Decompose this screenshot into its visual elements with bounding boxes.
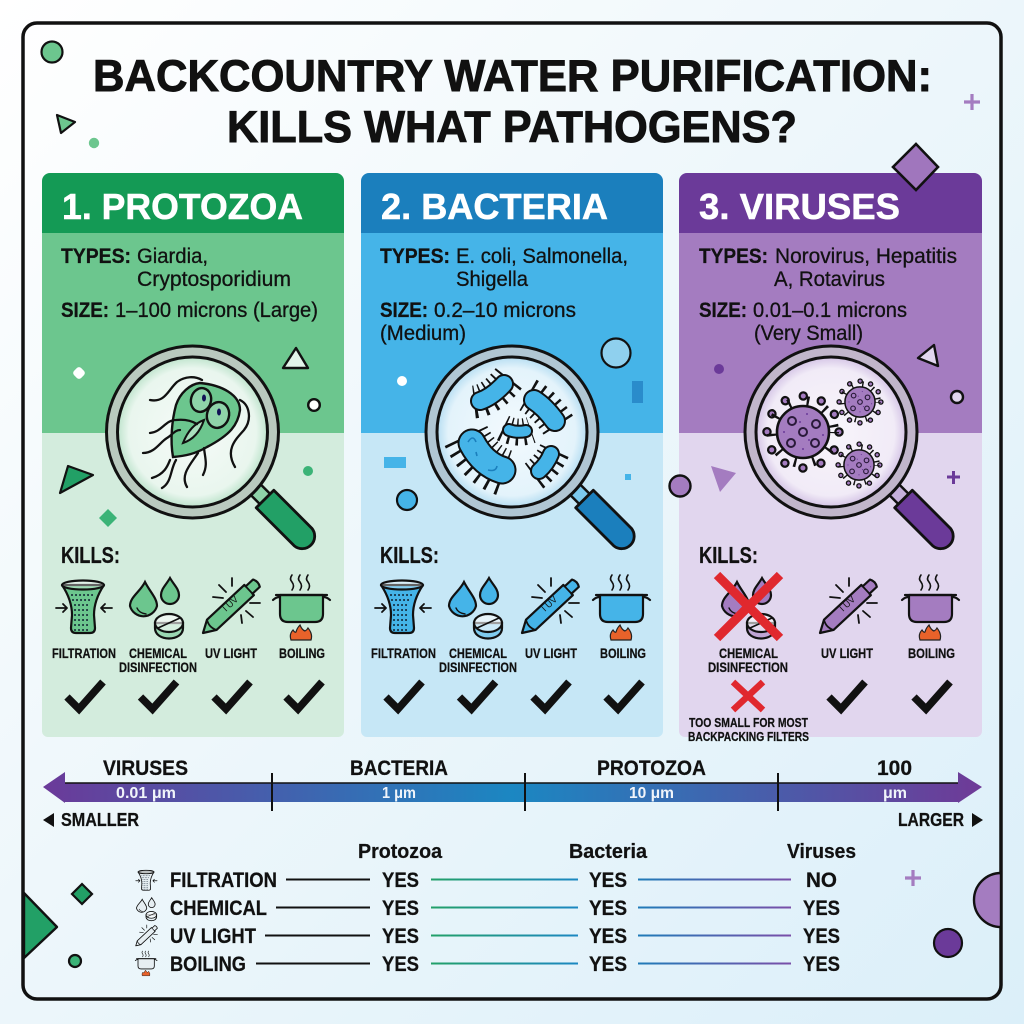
method: UV light: UV LIGHT <box>525 646 578 661</box>
row: chemical: CHEMICAL <box>170 897 267 920</box>
scale labels: 1 μm <box>382 785 416 802</box>
row: filtration: YES <box>382 869 419 892</box>
decorative shapes: top <box>42 42 980 148</box>
icon: magnifier with viruses <box>745 346 953 549</box>
table header <box>358 841 856 863</box>
scale arrow bar <box>43 772 982 803</box>
method: chemical disinfection <box>439 578 517 709</box>
method: boiling <box>902 575 959 709</box>
text block: types and size: A, Rotavirus <box>774 268 885 291</box>
row: chemical: YES <box>589 897 627 920</box>
heading: viruses: 3. VIRUSES <box>699 186 900 227</box>
method: filtration <box>52 580 116 709</box>
panel: bacteria <box>361 173 663 737</box>
note: filters: BACKPACKING FILTERS <box>688 730 809 744</box>
title <box>93 52 932 152</box>
panel background <box>679 173 982 737</box>
row: UV light: YES <box>803 925 840 948</box>
text block: types and size: 1–100 microns (Large) <box>115 299 318 322</box>
table header: Protozoa <box>358 841 443 863</box>
text block: types and size: SIZE: <box>380 299 428 322</box>
row: boiling: YES <box>589 953 627 976</box>
table header: Viruses <box>787 841 856 863</box>
table header: Bacteria <box>569 841 648 863</box>
decorative shapes: bacteria <box>384 338 643 510</box>
text block: types and size: E. coli, Salmonella, <box>456 245 628 268</box>
text block: types and size: Norovirus, Hepatitis <box>775 245 957 268</box>
row: UV light: YES <box>589 925 627 948</box>
text block: types and size: 0.2–10 microns <box>434 299 576 322</box>
heading: kills: KILLS: <box>380 542 439 568</box>
method: UV light: UV LIGHT <box>821 646 874 661</box>
decorative diamond <box>893 144 938 190</box>
heading: kills: KILLS: <box>61 542 120 568</box>
row: filtration: NO <box>806 869 837 892</box>
text block: types and size: (Very Small) <box>754 322 863 345</box>
heading: bacteria: 2. BACTERIA <box>381 186 608 227</box>
row: chemical: YES <box>382 897 419 920</box>
row: UV light <box>134 925 840 948</box>
text block: types and size: (Medium) <box>380 322 466 345</box>
panel: viruses <box>670 144 982 744</box>
row: filtration <box>136 869 837 892</box>
icon: magnifier with bacteria <box>426 346 634 549</box>
row: chemical <box>136 897 840 921</box>
row: UV light: YES <box>382 925 419 948</box>
method: chemical disinfection: CHEMICAL <box>129 646 187 661</box>
title: KILLS WHAT PATHOGENS? <box>227 103 797 152</box>
decorative shapes: protozoa <box>60 348 320 527</box>
method: UV light: UV LIGHT <box>205 646 258 661</box>
row: boiling: BOILING <box>170 953 246 976</box>
row: UV light: UV LIGHT <box>170 925 256 948</box>
row: filtration: YES <box>589 869 627 892</box>
method: chemical disinfection: DISINFECTION <box>439 660 517 675</box>
method: chemical disinfection <box>119 578 197 709</box>
icon: magnifier with giardia <box>106 346 315 549</box>
method: boiling: BOILING <box>279 646 325 661</box>
scale labels <box>103 757 912 802</box>
row: chemical: YES <box>803 897 840 920</box>
text block: types and size <box>699 245 957 345</box>
text block: types and size: TYPES: <box>380 245 450 268</box>
method: chemical disinfection (crossed out): CHEMICAL <box>719 646 778 661</box>
text block: types and size: Giardia, <box>137 245 208 268</box>
method: boiling: BOILING <box>908 646 955 661</box>
method: UV light: I UV <box>540 594 559 613</box>
method: boiling <box>273 575 330 709</box>
summary table <box>134 841 856 976</box>
text block: types and size <box>380 245 628 345</box>
method: chemical disinfection (crossed out) <box>708 575 788 710</box>
method: boiling: BOILING <box>600 646 646 661</box>
text block: types and size: Cryptosporidium <box>137 268 291 291</box>
method: boiling <box>593 575 650 709</box>
method: UV light: I UV <box>221 594 240 613</box>
method: chemical disinfection: CHEMICAL <box>449 646 507 661</box>
scale labels: VIRUSES <box>103 757 188 780</box>
scale labels: 0.01 μm <box>116 785 176 802</box>
method: filtration: FILTRATION <box>52 646 116 661</box>
method: UV light <box>517 577 581 709</box>
panel: protozoa <box>42 173 344 737</box>
method: chemical disinfection (crossed out): DISINFECTION <box>708 660 788 675</box>
text block: types and size: TYPES: <box>699 245 768 268</box>
heading: protozoa: 1. PROTOZOA <box>62 186 303 227</box>
panel background <box>42 173 344 737</box>
row: boiling: YES <box>382 953 419 976</box>
note: filters <box>688 716 809 744</box>
text block: types and size: 0.01–0.1 microns <box>753 299 907 322</box>
larger label: LARGER <box>898 810 964 830</box>
decorative shapes: viruses <box>670 345 963 496</box>
heading: kills: KILLS: <box>699 542 758 568</box>
panel background <box>361 173 663 737</box>
text block: types and size: SIZE: <box>61 299 109 322</box>
row: boiling <box>135 951 840 976</box>
method: chemical disinfection: DISINFECTION <box>119 660 197 675</box>
method: filtration <box>371 580 436 709</box>
text block: types and size: Shigella <box>456 268 528 291</box>
scale labels: 100 <box>877 757 912 780</box>
decorative shapes: bottom <box>24 870 1001 967</box>
title: BACKCOUNTRY WATER PURIFICATION: <box>93 52 932 101</box>
size scale <box>43 757 983 830</box>
row: boiling: YES <box>803 953 840 976</box>
scale ticks <box>272 773 778 811</box>
text block: types and size <box>61 245 318 322</box>
row: filtration: FILTRATION <box>170 869 277 892</box>
method: UV light: I UV <box>838 594 857 613</box>
text block: types and size: TYPES: <box>61 245 131 268</box>
text block: types and size: SIZE: <box>699 299 747 322</box>
scale labels: PROTOZOA <box>597 757 706 780</box>
note: filters: TOO SMALL FOR MOST <box>689 716 808 730</box>
smaller label: SMALLER <box>61 810 139 830</box>
method: UV light <box>198 577 262 709</box>
method: filtration: FILTRATION <box>371 646 436 661</box>
scale labels: μm <box>883 785 907 802</box>
method: UV light <box>815 577 879 709</box>
scale labels: BACTERIA <box>350 757 448 780</box>
scale labels: 10 μm <box>629 785 674 802</box>
